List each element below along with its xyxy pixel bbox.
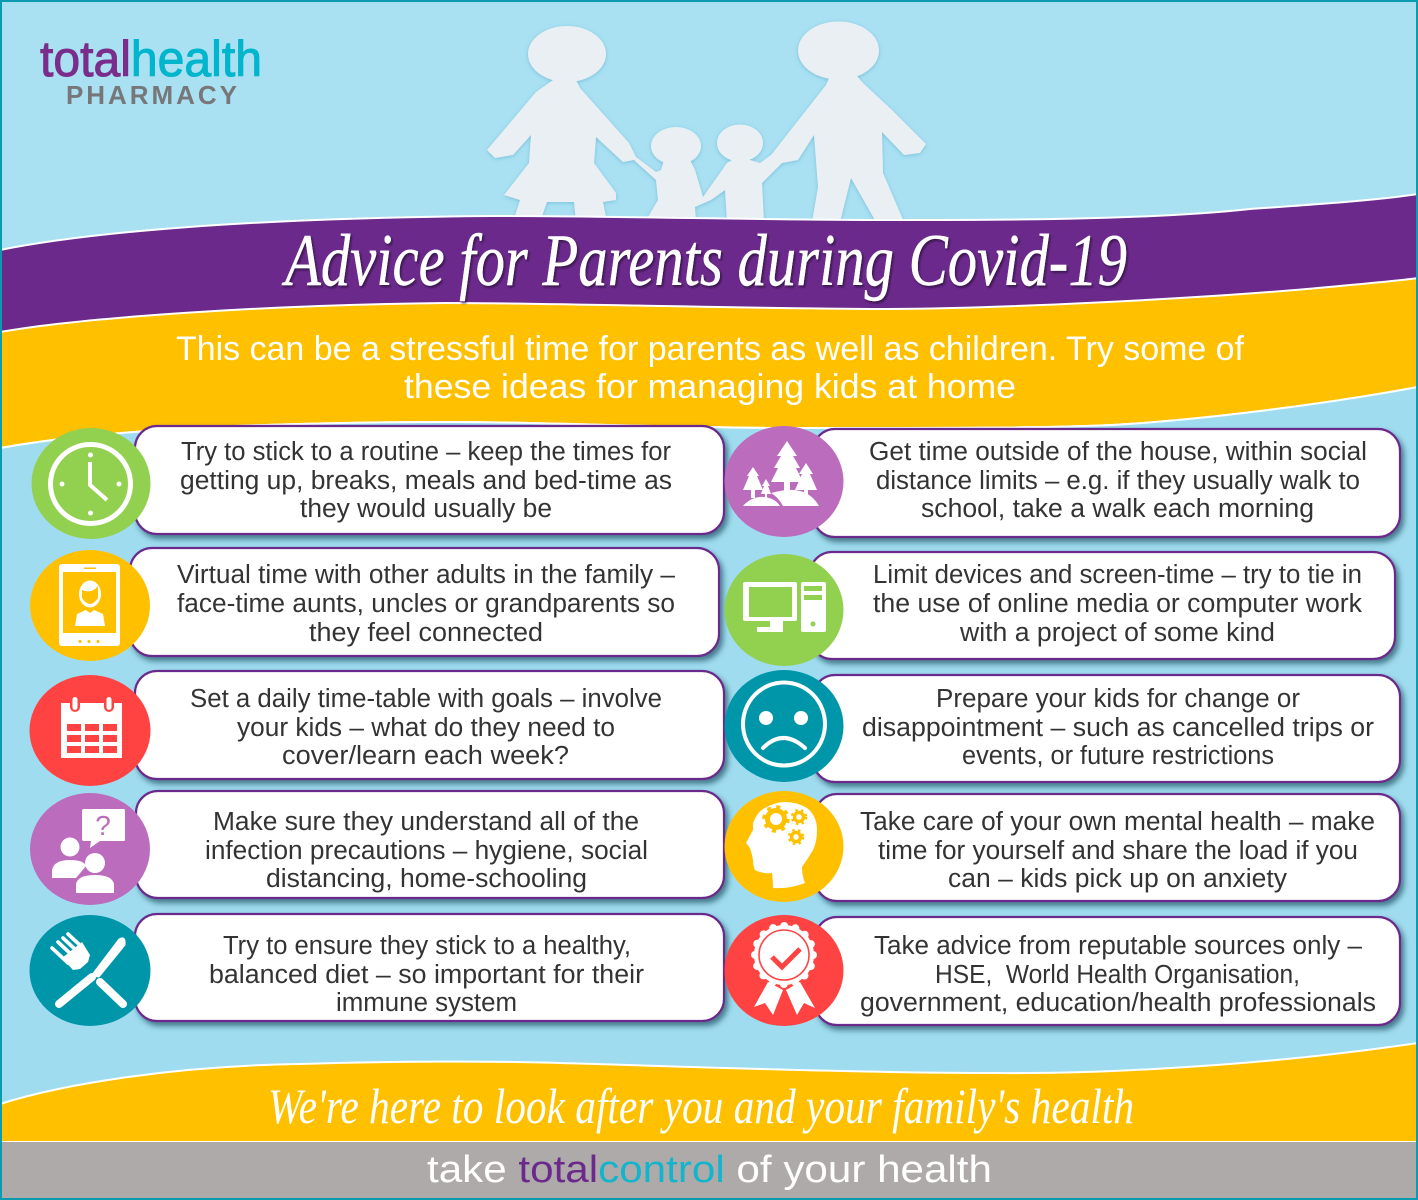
tip: prepare for change: disappointment – such as cancelled trips or <box>862 714 1375 742</box>
tip: own mental health <box>724 791 1400 902</box>
tip: routine: they would usually be <box>300 495 552 523</box>
footer message: We're here to look after you and your family's health <box>268 1078 1134 1134</box>
tip: prepare for change: Prepare your kids for change or <box>936 685 1301 713</box>
panel: light blue tips background <box>0 387 1418 1110</box>
logo: totalhealth pharmacy: totalhealth <box>40 31 262 87</box>
tip: limit devices: the use of online media or computer work <box>873 590 1362 618</box>
tip: daily time-table: cover/learn each week? <box>282 742 569 770</box>
tip: prepare for change <box>724 670 1400 782</box>
tip: virtual time: face-time aunts, uncles or grandparents so <box>177 590 675 618</box>
tip: own mental health: Take care of your own mental health – make <box>860 808 1375 836</box>
tip: daily time-table: your kids – what do they need to <box>237 714 615 742</box>
tip: daily time-table: Set a daily time-table with goals – involve <box>190 685 662 713</box>
tip: reputable sources: HSE, World Health Organisation, <box>935 961 1300 989</box>
tip: healthy diet <box>30 914 724 1026</box>
tip: healthy diet: balanced diet – so important for their <box>209 961 645 989</box>
intro text <box>176 330 1245 406</box>
tip: healthy diet: Try to ensure they stick to a healthy, <box>223 932 631 960</box>
tip: prepare for change: events, or future restrictions <box>962 742 1274 770</box>
icon: desktop computer <box>743 582 826 632</box>
tip: reputable sources <box>724 915 1400 1026</box>
tip: infection precautions: infection precautions – hygiene, social <box>205 837 648 865</box>
band: grey strapline <box>0 1142 1418 1200</box>
tip: virtual time: Virtual time with other adults in the family – <box>177 561 676 589</box>
tip: own mental health: can – kids pick up on anxiety <box>948 865 1287 893</box>
tip: reputable sources: government, education/health professionals <box>860 989 1376 1017</box>
logo: totalhealth pharmacy <box>40 31 262 110</box>
icon: tablet video call <box>59 564 120 646</box>
tip: routine <box>32 426 724 539</box>
tip: infection precautions: distancing, home-schooling <box>266 865 587 893</box>
tip: limit devices: Limit devices and screen-time – try to tie in <box>873 561 1362 589</box>
icon: clock <box>50 444 130 524</box>
icon: people with question bubble: ? <box>95 810 111 841</box>
tip: reputable sources: Take advice from reputable sources only – <box>874 932 1363 960</box>
tip: daily time-table <box>30 671 724 786</box>
icon: knife and fork <box>52 934 125 1004</box>
band: yellow footer wave <box>0 1043 1418 1142</box>
tip: virtual time: they feel connected <box>309 619 543 647</box>
icon: calendar <box>61 696 122 758</box>
icon: trees on hills <box>743 441 819 506</box>
tip: routine: Try to stick to a routine – keep the times for <box>181 438 672 466</box>
icon: people with question bubble <box>52 809 125 893</box>
icon: award rosette <box>754 925 815 1015</box>
logo: totalhealth pharmacy: PHARMACY <box>66 80 237 110</box>
tip: time outside: distance limits – e.g. if they usually walk to <box>876 467 1360 495</box>
tip: routine: getting up, breaks, meals and bed-time as <box>180 467 672 495</box>
title: Advice for Parents during Covid-19 <box>281 220 1127 302</box>
tip: limit devices <box>724 552 1395 666</box>
illustration: paper cut-out family <box>487 22 926 222</box>
tip: infection precautions: Make sure they understand all of the <box>213 808 639 836</box>
intro text: This can be a stressful time for parents as well as children. Try some of <box>176 330 1245 368</box>
intro text: these ideas for managing kids at home <box>404 368 1016 406</box>
tip: time outside <box>724 426 1400 537</box>
tip: healthy diet: immune system <box>336 989 517 1017</box>
tip: limit devices: with a project of some kind <box>959 619 1275 647</box>
band: yellow intro ribbon <box>0 278 1418 448</box>
tip: virtual time <box>30 548 719 661</box>
icon: sad face <box>743 682 825 766</box>
tip: infection precautions <box>30 791 724 905</box>
icon: head with gears <box>746 802 817 888</box>
tip: time outside: Get time outside of the house, within social <box>869 438 1367 466</box>
strapline text: take totalcontrol of your health <box>427 1149 992 1191</box>
tip: own mental health: time for yourself and share the load if you <box>878 837 1358 865</box>
band: purple title ribbon <box>0 194 1418 400</box>
tip: time outside: school, take a walk each morning <box>921 495 1314 523</box>
